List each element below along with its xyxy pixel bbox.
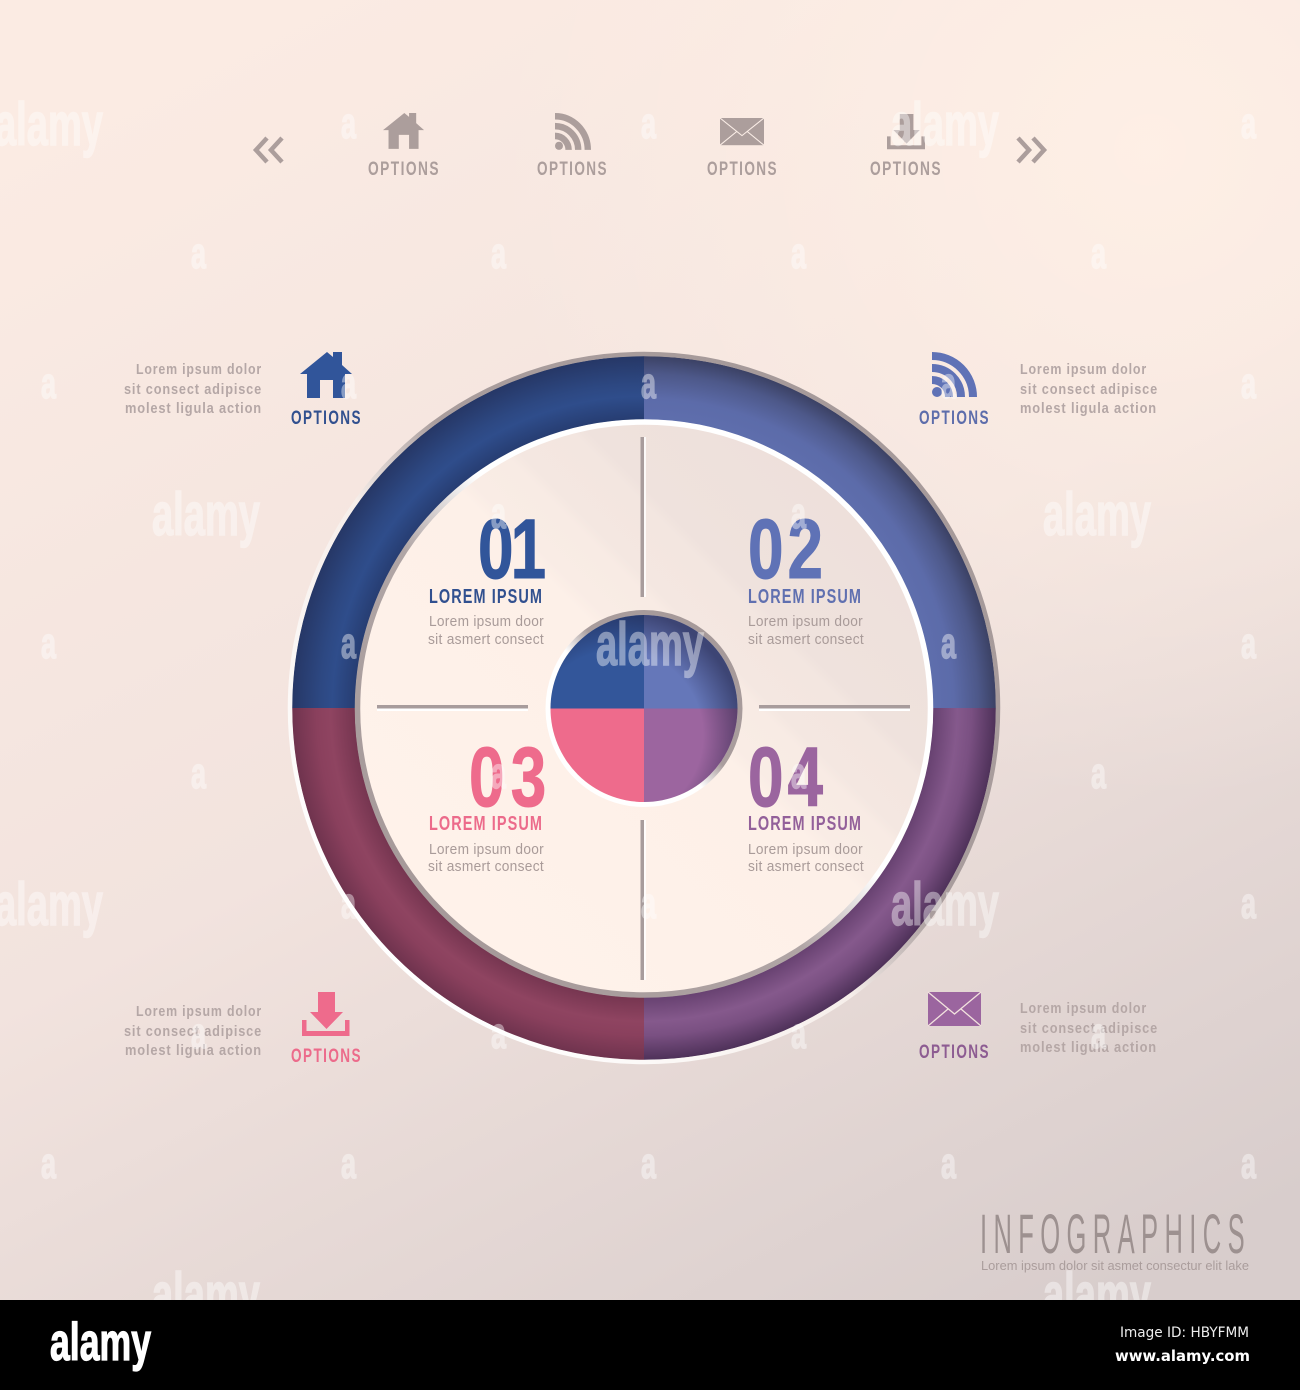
watermarks: a: [341, 1139, 356, 1188]
label: options: OPTIONS: [291, 1046, 362, 1067]
watermarks: a: [641, 879, 656, 928]
watermarks: a: [641, 99, 656, 148]
description text: [124, 361, 262, 417]
label: options: OPTIONS: [870, 159, 942, 180]
watermarks: alamy: [1043, 1261, 1151, 1328]
body text: Lorem ipsum door: [429, 842, 544, 858]
watermarks: a: [1241, 879, 1256, 928]
watermarks: a: [1241, 1139, 1256, 1188]
circular diagram: [290, 354, 998, 1062]
watermarks: a: [1091, 749, 1106, 798]
watermarks: a: [41, 1139, 56, 1188]
side block: bottom-right: [919, 992, 1158, 1063]
watermarks: a: [341, 99, 356, 148]
inner disc: [355, 420, 933, 998]
description text: Lorem ipsum dolor: [136, 361, 262, 378]
body text: [748, 614, 864, 648]
description text: [1020, 361, 1158, 417]
label: options: OPTIONS: [368, 159, 440, 180]
body text: sit asmert consect: [428, 859, 544, 875]
quadrant divider lines: [377, 437, 910, 980]
watermarks: a: [641, 359, 656, 408]
number: 04: [748, 729, 823, 824]
description text: sit consect adipisce: [124, 381, 262, 398]
body text: Lorem ipsum door: [429, 614, 544, 630]
number: 03: [469, 729, 546, 824]
body text: sit asmert consect: [428, 632, 544, 648]
heading: LOREM IPSUM: [429, 813, 543, 835]
watermarks: alamy: [152, 481, 260, 548]
description text: Lorem ipsum dolor: [1020, 1000, 1147, 1017]
watermarks: a: [1241, 619, 1256, 668]
watermarks: a: [341, 879, 356, 928]
description text: molest ligula action: [1020, 1039, 1157, 1056]
side block: bottom-left: [124, 992, 362, 1067]
watermarks: a: [41, 359, 56, 408]
watermarks: a: [191, 749, 206, 798]
section 03: [428, 729, 546, 875]
centre segment 3: [550, 708, 644, 802]
label: options: OPTIONS: [537, 159, 608, 180]
icon: home: [300, 352, 352, 398]
number: 01: [478, 501, 546, 596]
section 04: [748, 729, 864, 875]
icon: rss: [555, 116, 588, 150]
label: options: OPTIONS: [919, 1042, 990, 1063]
centre segment 4: [644, 708, 738, 802]
heading: LOREM IPSUM: [748, 813, 862, 835]
image id: Image ID: HBYFMM: [1120, 1325, 1249, 1341]
top navigation: next arrow: [1018, 138, 1044, 162]
label: options: OPTIONS: [707, 159, 778, 180]
description text: Lorem ipsum dolor: [1020, 361, 1147, 378]
number: 02: [748, 501, 823, 596]
watermarks: a: [1091, 1009, 1106, 1058]
description text: [1020, 1000, 1158, 1056]
watermarks: a: [791, 1009, 806, 1058]
centre segment 1: [550, 615, 644, 708]
watermarks: a: [341, 359, 356, 408]
watermarks: a: [791, 749, 806, 798]
icon: download: [302, 992, 350, 1036]
watermarks: alamy: [0, 91, 103, 158]
watermarks: a: [491, 1009, 506, 1058]
description text: molest ligula action: [125, 400, 262, 417]
watermarks: a: [791, 229, 806, 278]
watermarks: a: [491, 229, 506, 278]
website: www.alamy.com: [1115, 1347, 1250, 1365]
watermarks: alamy: [0, 871, 103, 938]
label: options: OPTIONS: [291, 408, 362, 429]
heading: LOREM IPSUM: [429, 586, 543, 608]
icon: mail: [720, 118, 764, 145]
watermarks: a: [41, 619, 56, 668]
section 02: [748, 501, 864, 648]
description text: sit consect adipisce: [1020, 381, 1158, 398]
watermarks: a: [191, 1009, 206, 1058]
watermarks: alamy: [152, 1261, 260, 1328]
watermarks: a: [641, 1139, 656, 1188]
body text: [748, 842, 864, 875]
watermarks: a: [941, 359, 956, 408]
watermarks: alamy: [891, 871, 999, 938]
top option: download: [870, 114, 942, 180]
watermarks: alamy: [891, 91, 999, 158]
description text: molest ligula action: [1020, 400, 1157, 417]
body text: Lorem ipsum door: [748, 614, 863, 630]
watermarks: alamy: [596, 611, 704, 678]
watermarks: a: [1241, 99, 1256, 148]
section 01: [428, 501, 546, 648]
icon: rss: [932, 356, 973, 397]
watermarks: a: [941, 1139, 956, 1188]
icon: download: [887, 114, 925, 149]
heading: LOREM IPSUM: [748, 586, 862, 608]
side block: top-right: [919, 356, 1158, 429]
description text: Lorem ipsum dolor: [136, 1003, 262, 1020]
footer bar: [0, 1300, 1300, 1390]
subtitle: Lorem ipsum dolor sit asmet consectur elit lake: [981, 1259, 1249, 1273]
watermarks: a: [791, 489, 806, 538]
title block: [980, 1202, 1251, 1273]
body text: [428, 842, 544, 875]
description text: sit consect adipisce: [1020, 1020, 1158, 1037]
centre circle: [548, 612, 740, 804]
watermarks: a: [491, 489, 506, 538]
icon: mail: [928, 992, 981, 1026]
description text: molest ligula action: [125, 1042, 262, 1059]
top option: mail: [707, 118, 778, 180]
outer ring: [290, 354, 998, 1062]
description text: [124, 1003, 262, 1059]
watermarks: a: [1241, 359, 1256, 408]
top navigation: previous arrow: [256, 138, 282, 162]
body text: Lorem ipsum door: [748, 842, 863, 858]
watermarks: a: [191, 229, 206, 278]
side block: top-left: [124, 352, 362, 429]
top option: home: [368, 113, 440, 180]
body text: sit asmert consect: [748, 632, 864, 648]
watermarks: a: [941, 619, 956, 668]
body text: sit asmert consect: [748, 859, 864, 875]
ring segment 2: [644, 356, 996, 708]
watermarks: a: [1091, 229, 1106, 278]
centre segment 2: [644, 615, 738, 708]
top option: rss: [537, 116, 608, 180]
watermarks: a: [341, 619, 356, 668]
icon: home: [383, 113, 424, 149]
ring segment 1: [292, 356, 644, 708]
label: options: OPTIONS: [919, 408, 990, 429]
description text: sit consect adipisce: [124, 1023, 262, 1040]
ring segment 4: [644, 708, 996, 1060]
watermarks: alamy: [1043, 481, 1151, 548]
body text: [428, 614, 544, 648]
watermarks: a: [491, 749, 506, 798]
ring segment 3: [292, 708, 644, 1060]
footer logo: alamy: [50, 1313, 151, 1372]
